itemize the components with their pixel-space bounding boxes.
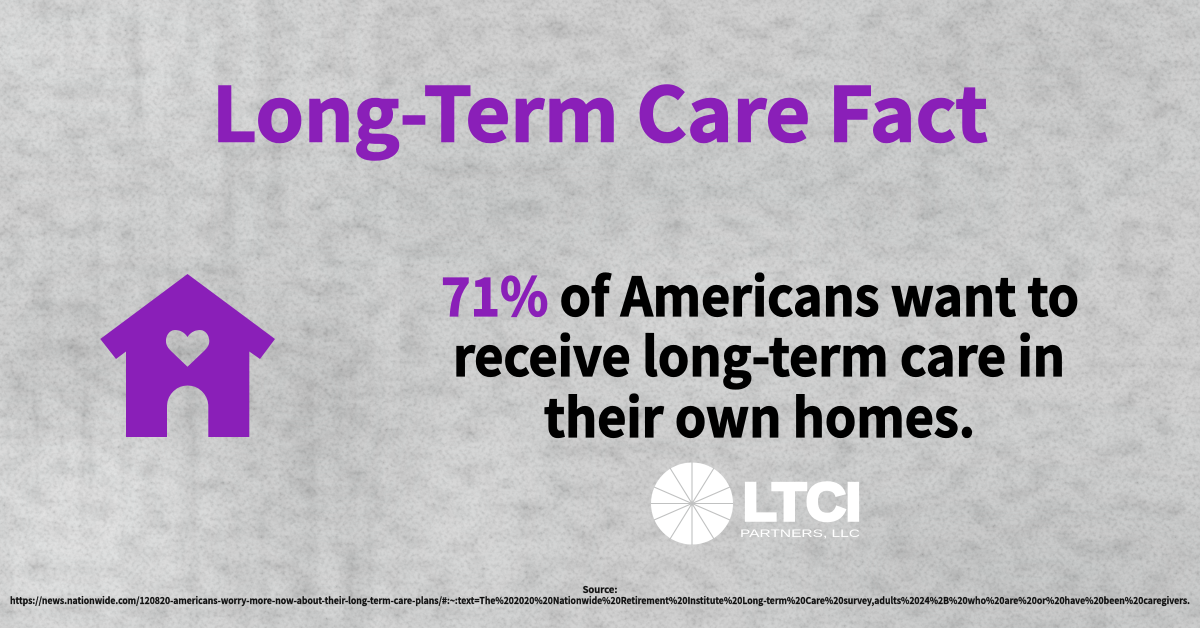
logo wordmark: LTCI [743,473,861,532]
source citation [10,582,1190,607]
line 1: 71% of Americans want to [441,256,1079,332]
line 2: receive long-term care in [453,316,1065,392]
logo wheel [651,462,733,545]
title: Long-Term Care Fact [212,54,988,164]
logo: LTCI Partners [651,462,861,545]
icon: house with heart [100,274,275,437]
logo subtitle: PARTNERS, LLC [740,528,860,540]
line 3: their own homes. [544,377,975,453]
source label: Source: [583,582,617,596]
fact statement [441,256,1079,453]
